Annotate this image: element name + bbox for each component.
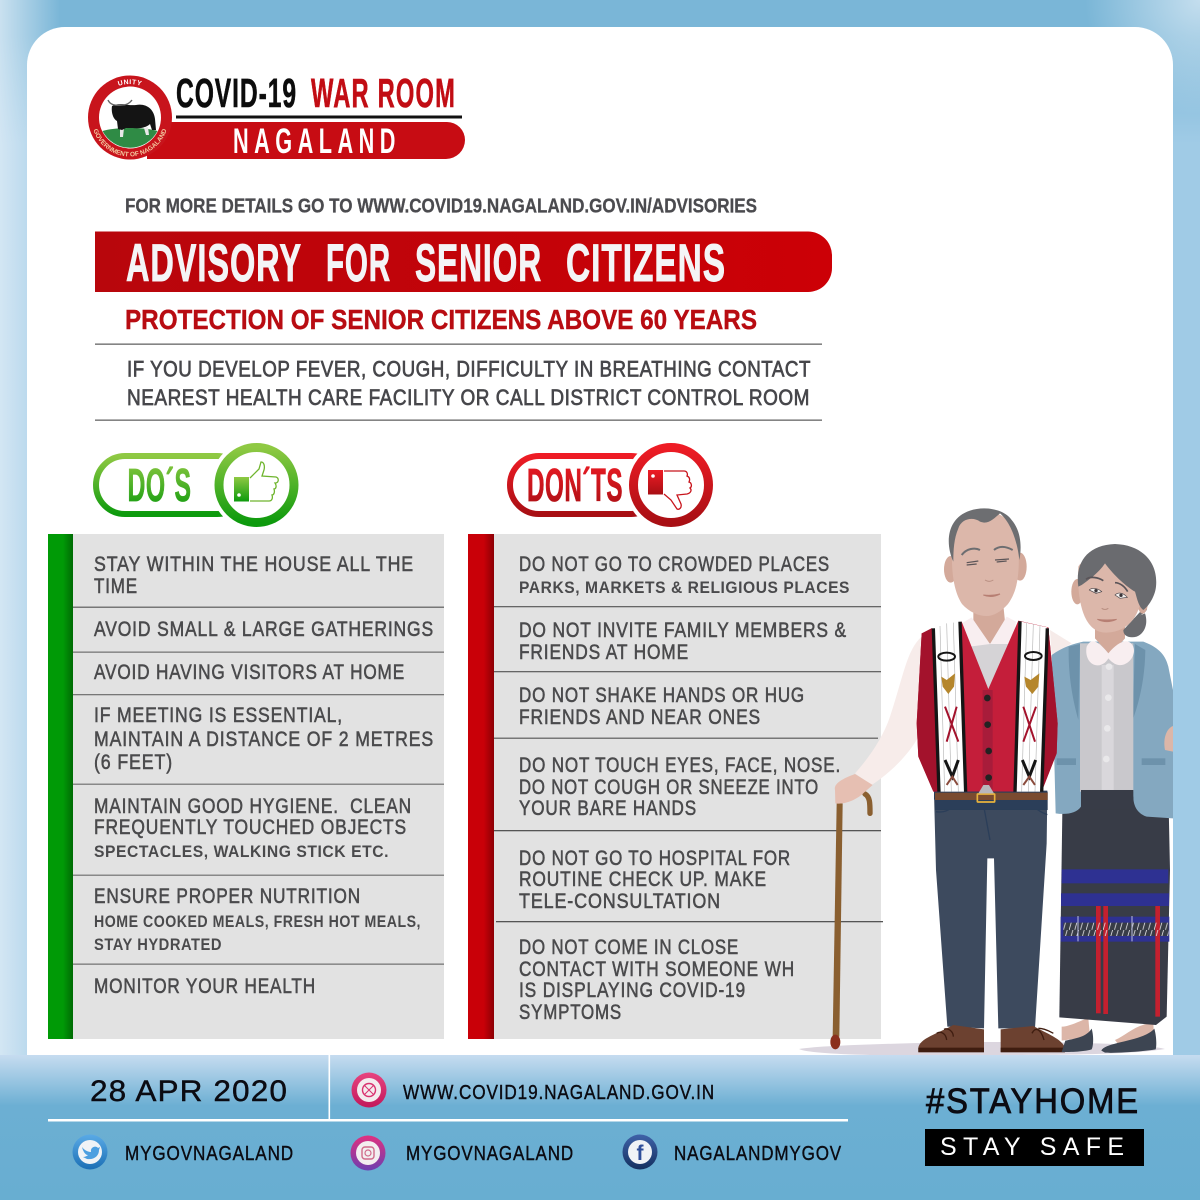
woman head bbox=[1095, 622, 1125, 655]
state emblem bbox=[88, 76, 172, 160]
item: hospital: TELE-CONSULTATION bbox=[519, 890, 721, 913]
item: touch face: DO NOT TOUCH EYES, FACE, NOSE. bbox=[519, 754, 841, 777]
item: family members: DO NOT INVITE FAMILY MEMBERS & bbox=[519, 619, 847, 642]
ground shadow bbox=[799, 1042, 1165, 1055]
item: shake hands: FRIENDS AND NEAR ONES bbox=[519, 706, 761, 729]
green side bar bbox=[48, 534, 73, 1039]
title banner: CITIZENS bbox=[566, 234, 726, 293]
woman upper body bbox=[1050, 544, 1173, 818]
left strap bbox=[932, 621, 966, 793]
item: crowded places bbox=[519, 553, 850, 597]
shoes bbox=[918, 1025, 984, 1052]
right strap bbox=[1015, 621, 1047, 793]
icon: thumbs up bbox=[234, 462, 278, 502]
symptom notice: IF YOU DEVELOP FEVER, COUGH, DIFFICULTY IN BREATHING CONTACT bbox=[127, 356, 811, 382]
item: close contact: DO NOT COME IN CLOSE bbox=[519, 936, 739, 959]
item: crowded places: DO NOT GO TO CROWDED PLACES bbox=[519, 553, 830, 576]
details link: FOR MORE DETAILS GO TO WWW.COVID19.NAGALAND.GOV.IN/ADVISORIES bbox=[125, 196, 757, 218]
red side bar bbox=[468, 534, 494, 1039]
item: touch face bbox=[519, 754, 841, 820]
item: touch face: DO NOT COUGH OR SNEEZE INTO bbox=[519, 776, 819, 799]
item: hospital: ROUTINE CHECK UP. MAKE bbox=[519, 868, 767, 891]
item: monitor health: MONITOR YOUR HEALTH bbox=[94, 975, 316, 998]
title banner: FOR bbox=[326, 234, 391, 293]
facebook handle: NAGALANDMYGOV bbox=[674, 1143, 842, 1165]
stay safe box: STAY SAFE bbox=[940, 1133, 1124, 1161]
date: 28 APR 2020 bbox=[90, 1075, 288, 1108]
nagaland text: NAGALAND bbox=[233, 123, 395, 161]
twitter handle: MYGOVNAGALAND bbox=[125, 1143, 294, 1165]
icon: instagram bbox=[350, 1136, 386, 1170]
head bbox=[944, 556, 957, 583]
item: hygiene: SPECTACLES, WALKING STICK ETC. bbox=[94, 842, 389, 861]
vest bbox=[917, 621, 1058, 792]
item: close contact: SYMPTOMS bbox=[519, 1001, 622, 1024]
item: distance bbox=[94, 704, 434, 774]
don'ts badge bbox=[510, 439, 717, 531]
item: nutrition: ENSURE PROPER NUTRITION bbox=[94, 885, 361, 908]
item: family members: FRIENDS AT HOME bbox=[519, 641, 689, 664]
hashtag: #STAYHOME bbox=[926, 1082, 1140, 1121]
do's badge bbox=[96, 439, 302, 531]
website: WWW.COVID19.NAGALAND.GOV.IN bbox=[403, 1082, 715, 1104]
neck bbox=[973, 605, 1005, 645]
item: distance: IF MEETING IS ESSENTIAL, bbox=[94, 704, 343, 727]
panel: do's list bbox=[48, 534, 444, 1039]
item: close contact: CONTACT WITH SOMEONE WH bbox=[519, 958, 795, 981]
don'ts badge: DON´TS bbox=[527, 459, 623, 511]
belt bbox=[935, 792, 1048, 810]
item: shake hands: DO NOT SHAKE HANDS OR HUG bbox=[519, 684, 805, 707]
subtitle: PROTECTION OF SENIOR CITIZENS ABOVE 60 YEARS bbox=[125, 304, 757, 335]
icon: thumbs down bbox=[648, 470, 691, 509]
war room rule bbox=[176, 116, 462, 118]
title banner: ADVISORY bbox=[126, 234, 302, 293]
item: close contact: IS DISPLAYING COVID-19 bbox=[519, 979, 746, 1002]
stay safe box bbox=[925, 1129, 1144, 1166]
item: stay within house bbox=[94, 553, 414, 598]
item: shake hands bbox=[519, 684, 805, 729]
symptom notice: NEAREST HEALTH CARE FACILITY OR CALL DISTRICT CONTROL ROOM bbox=[127, 385, 810, 410]
item: nutrition: HOME COOKED MEALS, FRESH HOT MEALS, bbox=[94, 912, 421, 931]
icon: facebook: f bbox=[636, 1142, 644, 1165]
item: touch face: YOUR BARE HANDS bbox=[519, 797, 697, 820]
man lower body bbox=[918, 791, 1065, 1052]
item: nutrition: STAY HYDRATED bbox=[94, 935, 222, 954]
red nagaland pill bbox=[147, 122, 465, 159]
icon: facebook bbox=[622, 1134, 658, 1170]
do's badge: DO´S bbox=[128, 459, 192, 511]
panel: don'ts list bbox=[468, 534, 883, 1039]
item: hygiene: MAINTAIN GOOD HYGIENE. CLEAN bbox=[94, 795, 412, 818]
title banner: SENIOR bbox=[415, 234, 542, 293]
state emblem: UNITY bbox=[118, 79, 142, 86]
man upper body bbox=[855, 508, 1058, 810]
state emblem: GOVERNMENT OF NAGALAND bbox=[94, 129, 166, 156]
item: hospital bbox=[519, 847, 791, 913]
woman skirt and shoes bbox=[1059, 790, 1170, 1053]
item: distance: (6 FEET) bbox=[94, 751, 173, 774]
item: visitors: AVOID HAVING VISITORS AT HOME bbox=[94, 661, 405, 684]
title banner bbox=[95, 232, 832, 293]
item: crowded places: PARKS, MARKETS & RELIGIOUS PLACES bbox=[519, 578, 850, 597]
item: hospital: DO NOT GO TO HOSPITAL FOR bbox=[519, 847, 791, 870]
item: nutrition bbox=[94, 885, 421, 954]
woman collar bbox=[1086, 641, 1134, 665]
left arm sleeve bbox=[855, 637, 922, 785]
item: family members bbox=[519, 619, 847, 664]
war room heading: WAR ROOM bbox=[311, 70, 456, 116]
item: hygiene bbox=[94, 795, 412, 861]
item: distance: MAINTAIN A DISTANCE OF 2 METRES bbox=[94, 728, 434, 751]
covid-19 heading: COVID-19 bbox=[176, 70, 297, 116]
icon: dribbble bbox=[352, 1072, 386, 1108]
item: stay within house: STAY WITHIN THE HOUSE ALL THE bbox=[94, 553, 414, 576]
item: gatherings: AVOID SMALL & LARGE GATHERINGS bbox=[94, 618, 434, 641]
item: hygiene: FREQUENTLY TOUCHED OBJECTS bbox=[94, 816, 407, 839]
illustration: elderly couple bbox=[799, 508, 1173, 1055]
item: close contact bbox=[519, 936, 795, 1024]
icon: twitter bbox=[72, 1134, 108, 1170]
panel: footer bbox=[0, 1055, 1200, 1200]
item: stay within house: TIME bbox=[94, 575, 138, 598]
symptom notice bbox=[127, 356, 811, 410]
header logo bbox=[88, 70, 465, 161]
cane and hand bbox=[830, 774, 873, 1049]
collar and shirt bbox=[965, 637, 1015, 689]
instagram handle: MYGOVNAGALAND bbox=[406, 1143, 574, 1165]
gaur animal bbox=[108, 100, 156, 137]
